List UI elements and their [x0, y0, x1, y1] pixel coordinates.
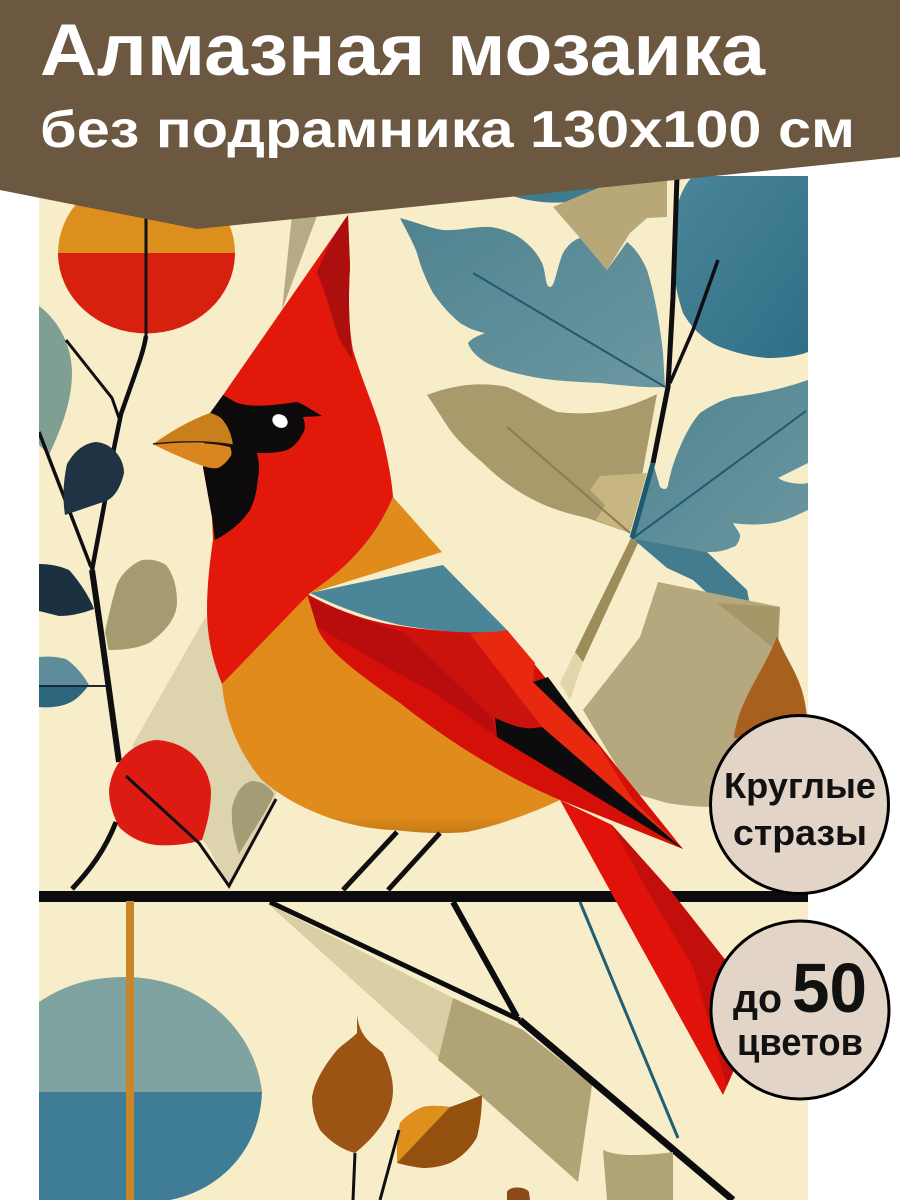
blue shoulder patch: [310, 565, 507, 632]
left leaves and branches: [39, 306, 177, 762]
top beige shard: [282, 216, 317, 310]
shoulder: [308, 497, 442, 594]
cardinal bird: [153, 215, 683, 849]
small olive leaf: [232, 781, 274, 854]
red berry: [72, 740, 276, 889]
badge: up to 50 colours: [711, 921, 889, 1099]
body orange: [222, 594, 560, 833]
badge: round rhinestones: [710, 716, 888, 894]
beige triangle behind bird: [132, 616, 278, 888]
horizontal branch: [39, 891, 808, 902]
wing black feathers: [533, 677, 598, 745]
body red: [203, 215, 393, 684]
beak: [153, 413, 233, 445]
badge: up to 50 colours: до: [733, 977, 782, 1021]
top left sun: [58, 205, 235, 336]
lower panel shapes: [267, 902, 733, 1200]
badge: up to 50 colours: 50: [792, 949, 867, 1027]
badge: round rhinestones: стразы: [733, 812, 867, 853]
header banner: [0, 0, 900, 229]
subtitle: без подрамника 130х100 см: [40, 101, 855, 159]
top right leaves: [400, 176, 808, 807]
crest shadow: [317, 215, 353, 360]
lower left sun: [39, 901, 262, 1200]
lower brown leaves: [312, 1015, 673, 1200]
badge: up to 50 colours: цветов: [737, 1022, 863, 1064]
eye: [272, 414, 288, 428]
bird legs: [343, 832, 440, 890]
wing: [307, 594, 683, 849]
badge: round rhinestones: Круглые: [724, 765, 876, 806]
title: Алмазная мозаика: [40, 10, 767, 91]
red tail: [560, 800, 742, 1095]
black head mask: [203, 395, 322, 540]
artwork panel: [39, 173, 808, 1200]
